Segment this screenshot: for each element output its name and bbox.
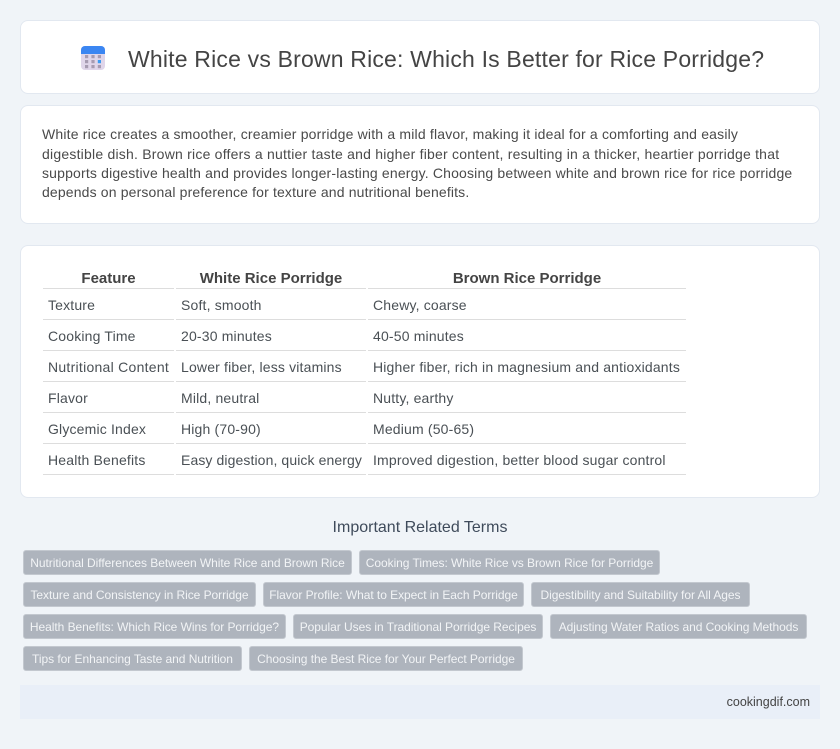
- row: cooking time: 20-30 minutes: [181, 328, 272, 344]
- row: flavor: Mild, neutral: [181, 390, 259, 406]
- summary paragraph: depends on personal preference for texture and nutritional benefits.: [42, 184, 469, 200]
- summary paragraph: digestible dish. Brown rice offers a nuttier taste and higher fiber content, resulting in a thicker, heartier porridge that: [42, 146, 779, 162]
- row: glycemic index: High (70-90): [181, 421, 261, 437]
- row: texture: Soft, smooth: [181, 297, 262, 313]
- tag: [23, 614, 286, 639]
- row: flavor: Nutty, earthy: [373, 390, 454, 406]
- tag: [23, 646, 242, 671]
- tag: Adjusting Water Ratios and Cooking Methods: [559, 620, 798, 634]
- row: health benefits: Easy digestion, quick energy: [181, 452, 362, 468]
- tag: [23, 582, 256, 607]
- row: texture: [48, 297, 467, 313]
- tag: Choosing the Best Rice for Your Perfect Porridge: [257, 652, 515, 666]
- tag: [263, 582, 524, 607]
- row: nutritional content: Nutritional Content: [48, 359, 169, 375]
- row: flavor: Flavor: [48, 390, 88, 406]
- tag: Flavor Profile: What to Expect in Each Porridge: [269, 588, 518, 602]
- summary paragraph: supports digestive health and provides longer-lasting energy. Choosing between white and brown rice for rice porridge: [42, 165, 792, 181]
- table header: White Rice Porridge: [200, 270, 342, 287]
- tag: [359, 550, 660, 575]
- table header: Feature: [81, 270, 136, 287]
- row: nutritional content: [48, 359, 680, 375]
- tag: [531, 582, 750, 607]
- row: glycemic index: [48, 421, 474, 437]
- row: health benefits: Health Benefits: [48, 452, 146, 468]
- row: texture: Texture: [48, 297, 95, 313]
- row: cooking time: [48, 328, 464, 344]
- tag: Cooking Times: White Rice vs Brown Rice for Porridge: [366, 556, 653, 570]
- tag: Health Benefits: Which Rice Wins for Porridge?: [30, 620, 279, 634]
- row: nutritional content: Higher fiber, rich in magnesium and antioxidants: [373, 359, 680, 375]
- tag: [23, 550, 352, 575]
- row: cooking time: Cooking Time: [48, 328, 136, 344]
- panel: comparison table: [20, 245, 820, 498]
- table header: Brown Rice Porridge: [453, 270, 601, 287]
- title: White Rice vs Brown Rice: Which Is Better for Rice Porridge?: [128, 46, 764, 72]
- tag: Digestibility and Suitability for All Ages: [540, 588, 740, 602]
- summary paragraph: [42, 126, 792, 200]
- row: health benefits: [48, 452, 666, 468]
- row: flavor: [48, 390, 454, 406]
- related term tags: [23, 550, 807, 671]
- row: health benefits: Improved digestion, better blood sugar control: [373, 452, 666, 468]
- tag: [249, 646, 523, 671]
- footer source text: cookingdif.com: [727, 695, 810, 709]
- tag: Tips for Enhancing Taste and Nutrition: [32, 652, 233, 666]
- tag: Nutritional Differences Between White Rice and Brown Rice: [30, 556, 345, 570]
- panel: header: [20, 20, 820, 94]
- icon: calendar: [81, 46, 105, 70]
- tag: Popular Uses in Traditional Porridge Recipes: [300, 620, 536, 634]
- footer bar: [20, 685, 820, 719]
- table header: [81, 270, 601, 287]
- heading: related terms: Important Related Terms: [333, 519, 507, 536]
- row: texture: Chewy, coarse: [373, 297, 467, 313]
- panel: summary text: [20, 105, 820, 224]
- tag: Texture and Consistency in Rice Porridge: [30, 588, 249, 602]
- row: cooking time: 40-50 minutes: [373, 328, 464, 344]
- tag: [293, 614, 543, 639]
- tag: [550, 614, 807, 639]
- row: glycemic index: Glycemic Index: [48, 421, 146, 437]
- summary paragraph: White rice creates a smoother, creamier porridge with a mild flavor, making it ideal for a comforting and easily: [42, 126, 738, 142]
- row: nutritional content: Lower fiber, less vitamins: [181, 359, 342, 375]
- row: glycemic index: Medium (50-65): [373, 421, 474, 437]
